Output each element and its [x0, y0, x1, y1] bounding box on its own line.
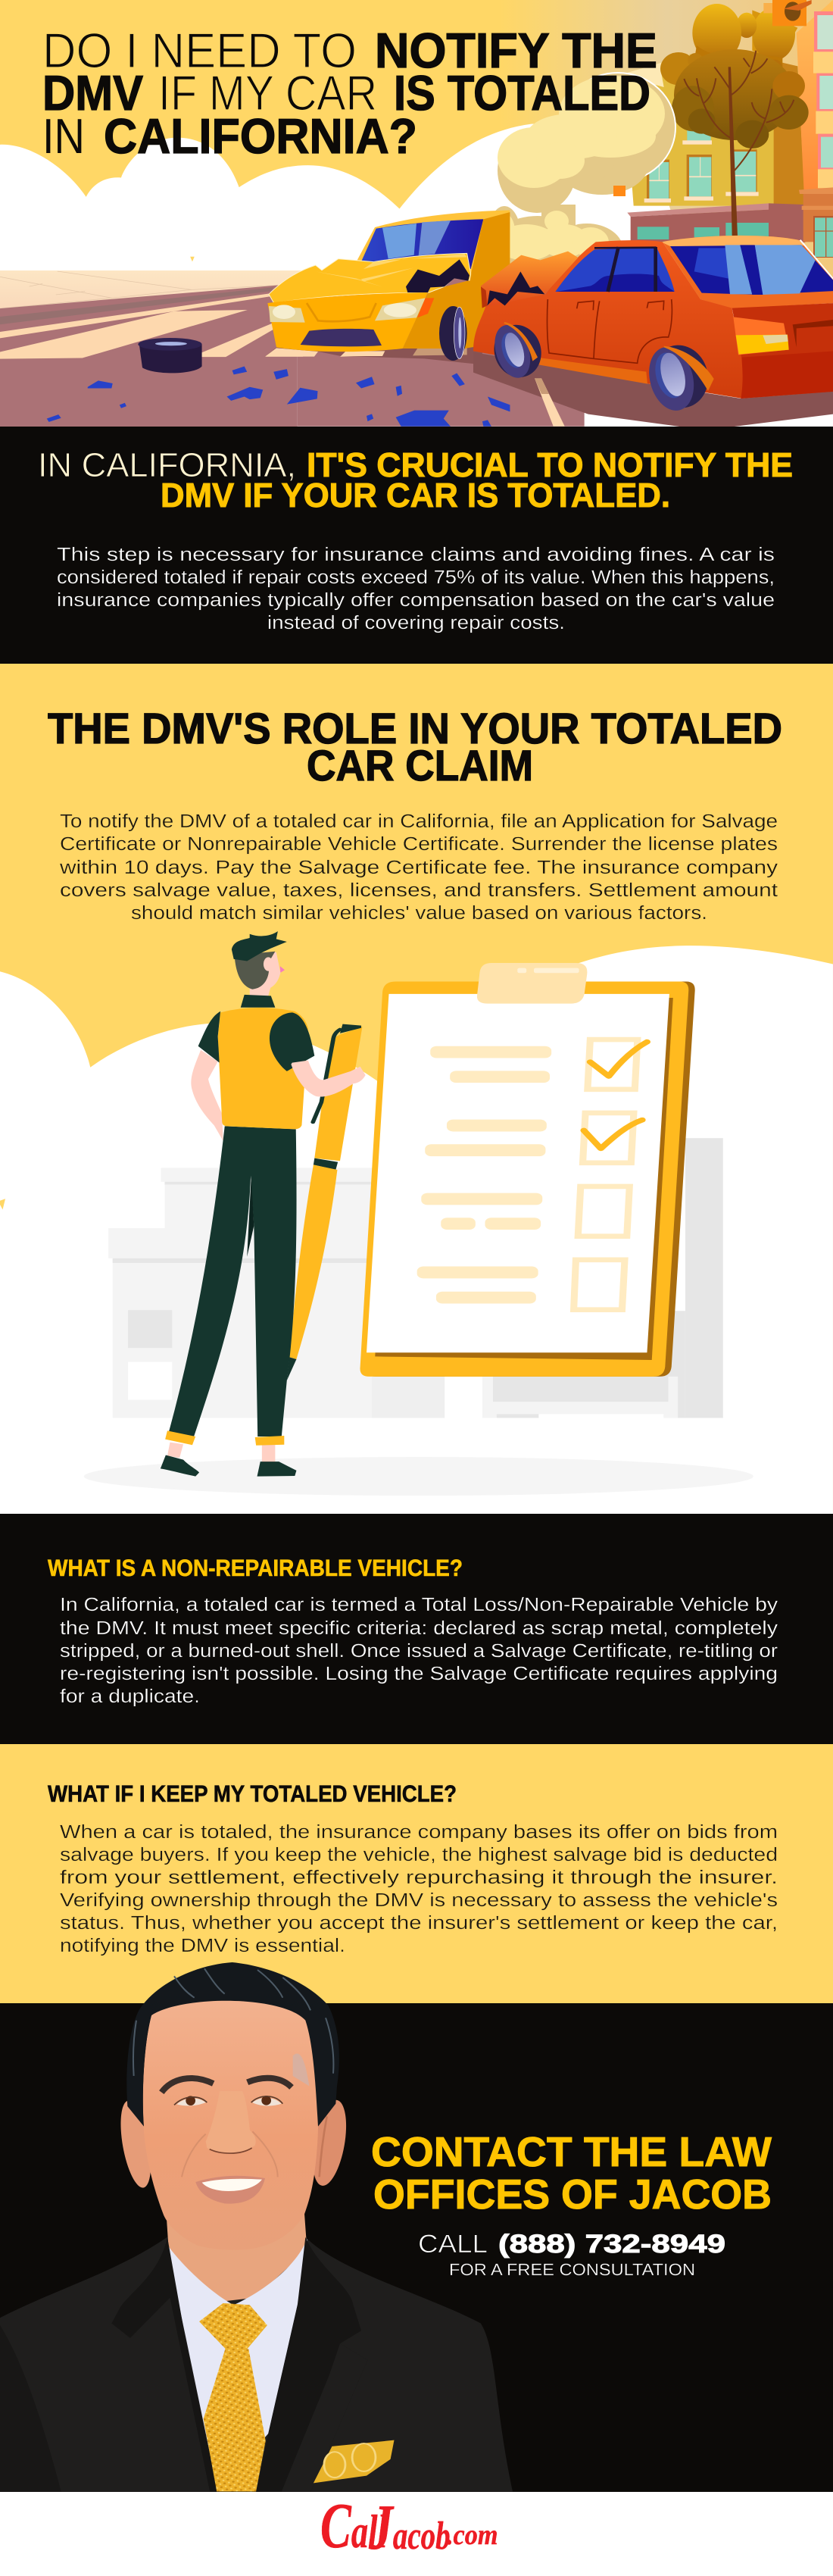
- hero traffic light: [763, 0, 812, 26]
- panel: contact band: [0, 2003, 833, 2492]
- clipboard: [360, 963, 695, 1377]
- suit and shirt: [0, 2206, 513, 2492]
- intro body text: This step is necessary for insurance claims and avoiding fines. A car is: [57, 544, 775, 565]
- section body text: To notify the DMV of a totaled car in California, file an Application for Salvage: [60, 811, 778, 832]
- phone number: [418, 2230, 725, 2259]
- section body text: covers salvage value, taxes, licenses, and transfers. Settlement amount: [60, 880, 778, 901]
- windows: [647, 160, 669, 200]
- trousers: [169, 1126, 297, 1436]
- panel: intro black band: [0, 427, 833, 664]
- phone number: CALL: [418, 2230, 488, 2259]
- attorney portrait: [0, 1962, 513, 2492]
- intro body text: considered totaled if repair costs exceed 75% of its value. When this happens,: [57, 567, 775, 588]
- doors: [548, 299, 672, 363]
- section body text: within 10 days. Pay the Salvage Certificate fee. The insurance company: [59, 857, 778, 878]
- section body text: Certificate or Nonrepairable Vehicle Certificate. Surrender the license plates: [60, 833, 778, 855]
- wheels: [487, 317, 548, 383]
- intro heading: IN CALIFORNIA,: [38, 445, 296, 484]
- section body text: should match similar vehicles' value based on various factors.: [131, 902, 707, 924]
- title: DMV: [42, 65, 143, 120]
- background buildings: [108, 1138, 723, 1418]
- title: IN: [42, 108, 85, 164]
- panel heading: WHAT IS A NON-REPAIRABLE VEHICLE?: [48, 1555, 463, 1581]
- checkboxes: [574, 1039, 638, 1310]
- hero road and sidewalk: [0, 270, 585, 551]
- intro body text: insurance companies typically offer compensation based on the car's value: [57, 589, 775, 611]
- head: [115, 1962, 352, 2250]
- intro body text: instead of covering repair costs.: [267, 612, 565, 633]
- nose: [206, 2091, 256, 2154]
- panel text: [60, 1594, 778, 1707]
- panel text: notifying the DMV is essential.: [60, 1935, 345, 1956]
- footer logo: .com: [447, 2519, 498, 2551]
- section heading: [48, 705, 782, 790]
- shop base: [627, 203, 769, 217]
- panel text: from your settlement, effectively repurchasing it through the insurer.: [60, 1867, 778, 1888]
- person: [161, 931, 366, 1477]
- panel: DMV role yellow section: [0, 664, 833, 1514]
- section heading: THE DMV'S ROLE IN YOUR TOTALED: [48, 705, 782, 753]
- hero white cloud: [0, 123, 691, 276]
- vest: [218, 1008, 308, 1129]
- white cloud backdrop: [0, 946, 833, 1514]
- panel text: Verifying ownership through the DMV is necessary to assess the vehicle's: [60, 1890, 778, 1911]
- section heading: CAR CLAIM: [307, 742, 533, 790]
- consultation note: FOR A FREE CONSULTATION: [449, 2260, 695, 2279]
- eyes: [176, 2099, 206, 2106]
- hero fallen tyre: [138, 338, 202, 373]
- temple highlight: [293, 2053, 309, 2086]
- title: [42, 23, 657, 164]
- hero illustration: car crash scene: [0, 0, 833, 551]
- intro body text: [57, 544, 775, 633]
- checklist lines: [417, 1046, 551, 1304]
- footer logo: Call: [320, 2490, 388, 2562]
- crumpled hood: [481, 252, 578, 307]
- footer logo: [0, 2490, 833, 2576]
- contact heading: CONTACT THE LAW: [371, 2128, 772, 2175]
- panel heading: WHAT IF I KEEP MY TOTALED VEHICLE?: [48, 1780, 457, 1807]
- section body text: [59, 811, 778, 924]
- panel: non-repairable vehicle: [0, 1514, 833, 1744]
- panel text: for a duplicate.: [60, 1686, 200, 1707]
- intro heading: IT'S CRUCIAL TO NOTIFY THE: [307, 445, 793, 484]
- hero glass debris: [47, 366, 510, 427]
- orange building: [797, 0, 833, 192]
- hero right buildings: [623, 0, 833, 258]
- panel: keeping totaled vehicle: [0, 1744, 833, 2003]
- intro heading: [38, 445, 793, 514]
- sill: [532, 358, 647, 384]
- ground shadow: [84, 1457, 753, 1496]
- intro heading: DMV IF YOUR CAR IS TOTALED.: [161, 476, 670, 514]
- panel text: stripped, or a burned-out shell. Once issued a Salvage Certificate, re-titling or: [60, 1640, 778, 1662]
- title: IS TOTALED: [394, 65, 650, 120]
- feet and cuffs: [167, 1443, 183, 1458]
- contact heading: OFFICES OF JACOB: [373, 2171, 772, 2218]
- eyebrows: [161, 2078, 214, 2093]
- panel text: [60, 1821, 778, 1956]
- panel text: When a car is totaled, the insurance company bases its offer on bids from: [60, 1821, 778, 1843]
- panel text: In California, a totaled car is termed a Total Loss/Non-Repairable Vehicle by: [60, 1594, 778, 1615]
- head: [250, 986, 271, 996]
- hero smoke cloud: [484, 73, 675, 286]
- panel text: salvage buyers. If you keep the vehicle, the highest salvage bid is deducted: [60, 1844, 778, 1865]
- hero tree: [660, 4, 809, 236]
- arms: [191, 1050, 223, 1141]
- title: DO I NEED TO: [42, 23, 357, 78]
- illustration: person with giant checklist: [0, 931, 833, 1514]
- panel text: the DMV. It must meet specific criteria: declared as scrap metal, completely: [60, 1618, 778, 1639]
- panel text: status. Thus, whether you accept the insurer's settlement or keep the car,: [60, 1912, 778, 1934]
- panel text: re-registering isn't possible. Losing the Salvage Certificate requires applying: [60, 1663, 778, 1684]
- giant pen: [314, 1027, 362, 1161]
- footer logo: Jacob: [368, 2492, 451, 2563]
- contact heading: [371, 2128, 772, 2218]
- title: IF MY CAR: [158, 65, 377, 120]
- hero yellow car: [265, 210, 510, 364]
- smile: [195, 2176, 265, 2204]
- title: NOTIFY THE: [375, 23, 657, 78]
- check marks: [584, 1042, 647, 1149]
- title: CALIFORNIA?: [104, 108, 417, 164]
- hero orange car: [473, 236, 833, 427]
- body: [473, 240, 743, 399]
- phone number: (888) 732-8949: [498, 2230, 725, 2259]
- rear-side lid: [663, 236, 833, 308]
